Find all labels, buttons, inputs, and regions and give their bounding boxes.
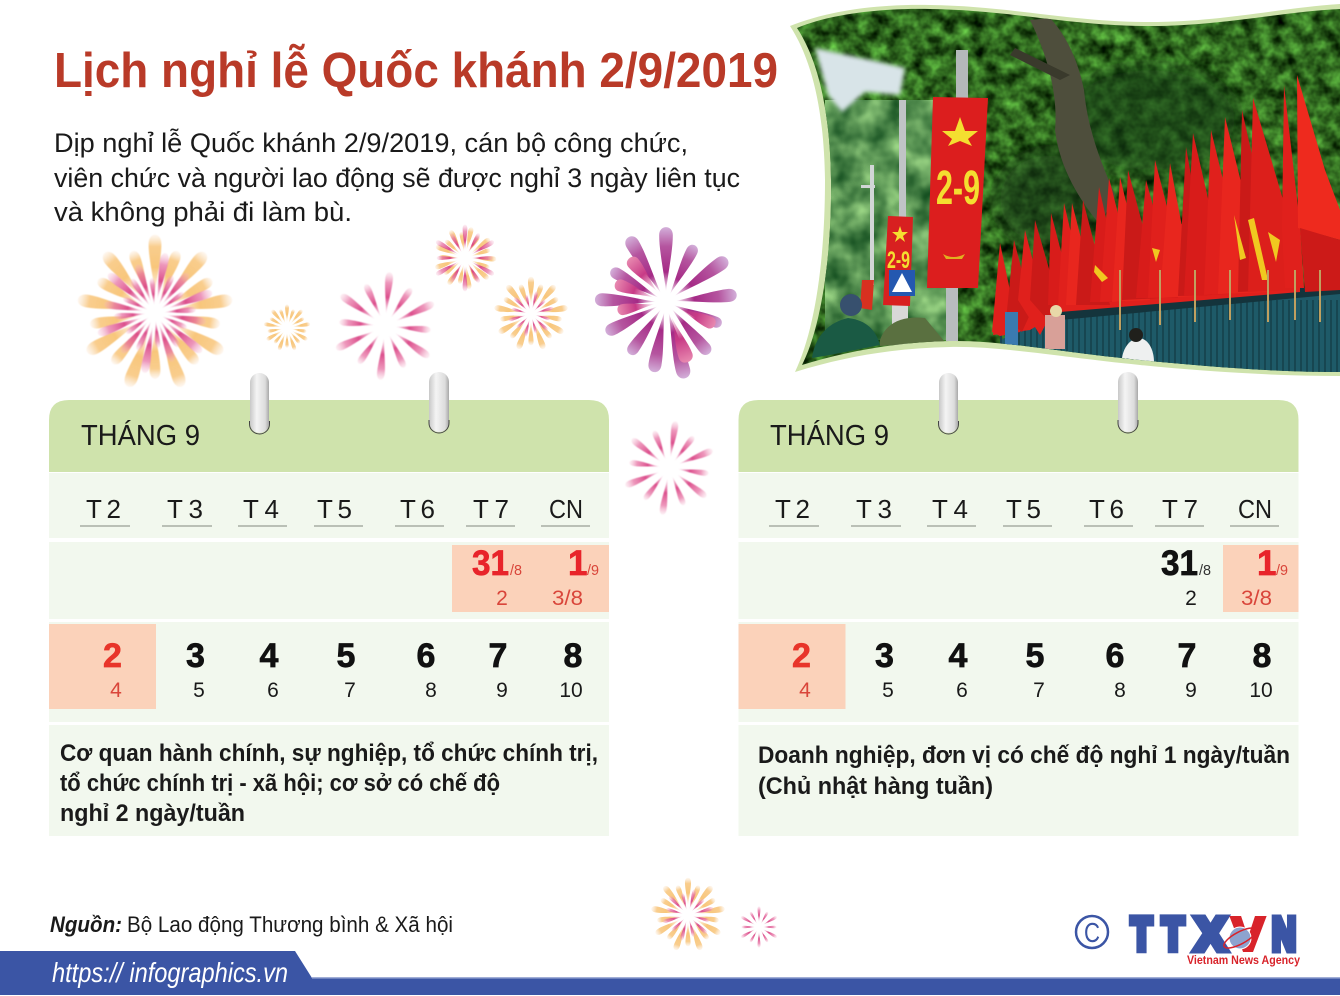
calendar: right [738,372,1298,836]
binder ring left [250,373,270,434]
right lunar dates: 7 [1033,679,1045,702]
right week dates: 4 [949,637,968,675]
logo: TTXVN [1076,908,1301,967]
right weekday labels: T 2 [775,494,810,524]
week dates: 4 [260,637,279,675]
caption left [60,740,598,827]
source: Nguồn: [50,912,122,937]
copyright mark: C [1084,917,1100,948]
right lunar dates: 6 [956,679,968,702]
right binder ring right [1118,372,1138,433]
caption right [758,742,1290,800]
week dates: 8 [564,637,582,675]
lunar dates [110,679,583,702]
right week dates: 8 [1253,637,1271,675]
week dates: 5 [337,637,355,675]
right weekday labels: T 4 [932,494,968,524]
logo letters: V [1232,908,1264,960]
firework: bottom small pink [740,906,778,948]
lunar dates: 7 [344,679,356,702]
intro text block: và không phải đi làm bù. [54,197,352,227]
calendar header: THÁNG 9 [81,419,200,452]
logo letters [1131,908,1296,960]
intro text block [54,127,740,227]
highlight: Sunday [1223,545,1298,612]
firework: purple large [595,227,737,380]
right weekday labels: T 3 [856,494,892,524]
right weekday labels: T 7 [1162,494,1198,524]
right week dates: 3 [875,637,894,675]
right weekday labels: CN [1238,494,1272,524]
highlight: Monday right [738,624,846,709]
week dates: 6 [417,637,435,675]
calendar header [49,400,609,472]
firework: bottom orange and pink [651,878,725,951]
right weekday labels: T 5 [1006,494,1041,524]
lunar dates: 6 [267,679,279,702]
dates 31/8 and 1/9: 1 [568,544,587,583]
dates 31/8 and 1/9: /8 [510,562,522,579]
far banner [860,280,874,310]
weekday labels: CN [549,494,583,524]
dates 31/8 and 1/9 right: /8 [1199,562,1211,579]
caption right: (Chủ nhật hàng tuần) [758,773,993,800]
footer bar [0,951,1340,995]
dates 31/8 and 1/9 right [1161,544,1288,610]
red flags [992,75,1340,336]
dates 31/8 and 1/9: 31 [472,544,509,583]
right lunar dates: 4 [799,679,811,702]
copyright mark [1076,916,1108,948]
main banner 2-9: 2-9 [936,162,980,215]
calendar: left [49,372,609,836]
logo letters: X [1195,908,1226,960]
dates 31/8 and 1/9 right: 2 [1185,587,1197,610]
week dates: 2 [103,637,122,675]
lunar dates: 10 [559,679,583,702]
title: Lịch nghỉ lễ Quốc khánh 2/9/2019 [54,44,778,98]
lunar dates: 9 [496,679,508,702]
main banner 2-9 [927,97,988,288]
right weekday labels: T 6 [1089,494,1124,524]
pedestrians [812,294,1154,362]
photo: street flags for National Day [790,0,1340,380]
footer url: https:// infographics.vn [52,957,288,988]
firework: large orange and pink [77,235,233,389]
dates 31/8 and 1/9 right: /9 [1276,562,1288,579]
dates 31/8 and 1/9 right: 3/8 [1241,587,1272,610]
right lunar dates: 10 [1249,679,1273,702]
right week dates [792,637,1271,675]
right week dates: 6 [1106,637,1124,675]
weekday labels: T 4 [243,494,279,524]
dates 31/8 and 1/9 right: 1 [1257,544,1276,583]
weekday labels: T 3 [167,494,203,524]
weekday labels: T 5 [317,494,352,524]
right calendar background bands [738,473,1298,836]
right lunar dates: 8 [1114,679,1126,702]
firework: orange and pink [494,277,568,350]
intro text block: Dịp nghỉ lễ Quốc khánh 2/9/2019, cán bộ công chức, [54,127,688,158]
dates 31/8 and 1/9 right: 31 [1161,544,1198,583]
weekday labels: T 7 [473,494,509,524]
week dates: 3 [186,637,205,675]
right calendar header [738,400,1298,472]
lamp posts [861,50,968,345]
logo globe [1221,924,1259,952]
caption left: Cơ quan hành chính, sự nghiệp, tổ chức chính trị, [60,740,598,767]
weekday labels: T 6 [400,494,435,524]
dates 31/8 and 1/9: 3/8 [552,587,583,610]
right lunar dates: 9 [1185,679,1197,702]
right lunar dates: 5 [882,679,894,702]
firework: pink [332,268,438,384]
dates 31/8 and 1/9 [472,544,599,610]
weekday labels: T 2 [86,494,121,524]
firework: pink middle [620,416,718,520]
dates 31/8 and 1/9: /9 [587,562,599,579]
lunar dates: 8 [425,679,437,702]
right week dates: 7 [1178,637,1196,675]
right week dates: 5 [1026,637,1044,675]
intro text block: viên chức và người lao động sẽ được nghỉ 3 ngày liên tục [54,163,740,193]
binder ring right [429,372,449,433]
firework: small pink and orange top [428,221,502,294]
right binder ring left [938,373,958,434]
logo tagline: Vietnam News Agency [1187,955,1301,967]
logo letters: T [1162,908,1184,960]
holiday highlight: Sat and Sun [452,545,609,612]
right calendar header: THÁNG 9 [770,419,889,452]
source: Bộ Lao động Thương bình & Xã hội [127,912,453,937]
week dates: 7 [489,637,507,675]
right weekday labels [769,494,1279,526]
weekday labels [80,494,590,526]
right lunar dates [799,679,1273,702]
fence [1000,287,1340,372]
small banner 2-9: 2-9 [887,247,910,274]
week dates [103,637,582,675]
lunar dates: 4 [110,679,122,702]
right week dates: 2 [792,637,811,675]
holiday highlight: Monday [49,624,156,709]
flag emblems and bamboo poles [1094,215,1320,330]
logo letters: N [1272,908,1296,960]
caption left: tổ chức chính trị - xã hội; cơ sở có chế độ [60,770,500,797]
caption left: nghỉ 2 ngày/tuần [60,800,245,827]
logo letters: T [1131,908,1152,960]
dates 31/8 and 1/9: 2 [496,587,508,610]
calendar background bands [49,473,609,836]
small banner 2-9 [883,216,915,306]
firework: small orange [264,304,310,351]
caption right: Doanh nghiệp, đơn vị có chế độ nghỉ 1 ngày/tuần [758,742,1290,769]
lunar dates: 5 [193,679,205,702]
